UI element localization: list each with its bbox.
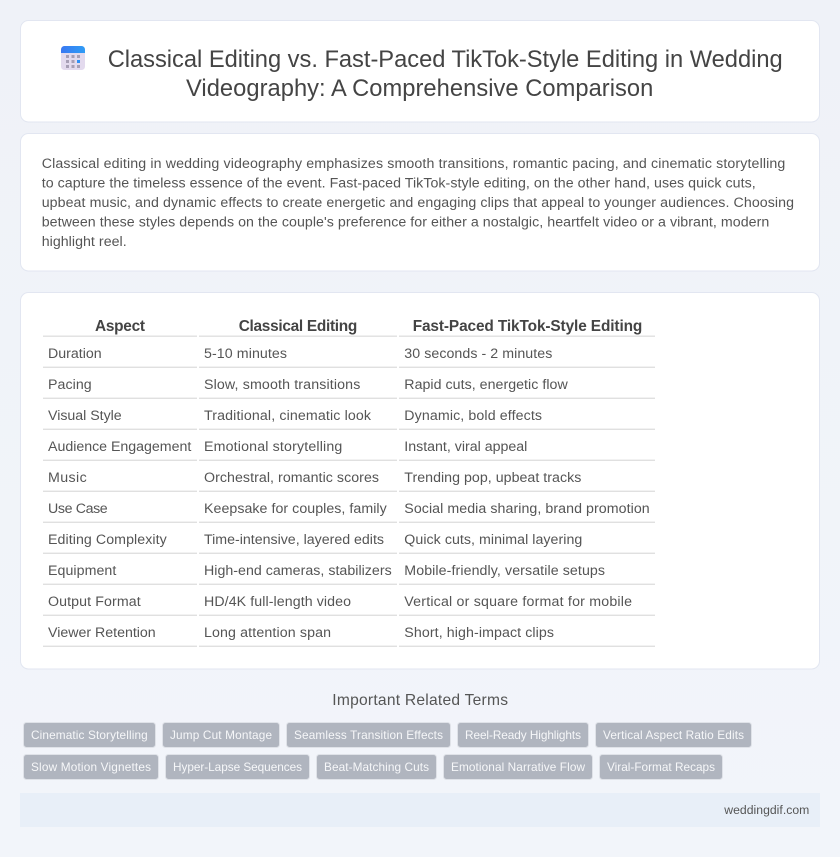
row: output format [43,594,655,616]
row: use case: Social media sharing, brand promotion [404,501,650,517]
row: equipment: Equipment [48,563,116,579]
row: equipment [43,563,655,585]
related term tags [24,722,752,780]
tag: seamless transition effects [286,722,450,748]
row: editing complexity: Time-intensive, layered edits [204,532,384,548]
row: music [43,470,655,492]
row: duration: 5-10 minutes [204,346,287,362]
tag: reel-ready highlights: Reel-Ready Highlights [465,728,581,742]
intro paragraph: highlight reel. [42,234,127,250]
tag: emotional narrative flow [444,754,592,780]
tag: jump cut montage: Jump Cut Montage [170,728,272,742]
row: music: Trending pop, upbeat tracks [404,470,581,486]
tag: jump cut montage [162,722,280,748]
panel: title header [20,20,820,122]
intro paragraph: Classical editing in wedding videography emphasizes smooth transitions, romantic pacing, and cinematic storytelling [42,156,785,172]
row: visual style: Visual Style [48,408,122,424]
tag: reel-ready highlights [458,722,588,748]
row: use case: Use Case [48,501,108,517]
row: audience engagement: Emotional storytelling [204,439,342,455]
row: duration [43,346,655,368]
row: pacing: Pacing [48,377,92,393]
intro paragraph: between these styles depends on the couple's preference for either a nostalgic, heartfelt video or a vibrant, modern [42,214,769,230]
title [108,47,783,102]
row: viewer retention: Short, high-impact clips [404,625,554,641]
footer source text: weddingdif.com [723,803,809,817]
row: visual style: Traditional, cinematic look [204,408,372,424]
tag: cinematic storytelling: Cinematic Storytelling [31,728,148,742]
panel: comparison table [20,292,820,669]
row: viewer retention: Viewer Retention [48,625,156,641]
tag: slow motion vignettes [24,754,158,780]
panel: introduction [20,134,820,271]
heading: important related terms: Important Related Terms [332,692,508,709]
intro paragraph: to capture the timeless essence of the event. Fast-paced TikTok-style editing, on the other hand, uses quick cuts, [42,176,756,192]
tag: hyper-lapse sequences: Hyper-Lapse Sequences [173,760,302,774]
row: pacing [43,377,655,399]
tag: beat-matching cuts: Beat-Matching Cuts [324,760,429,774]
tag: hyper-lapse sequences [166,754,310,780]
row: music: Orchestral, romantic scores [204,470,379,486]
tag: cinematic storytelling [24,722,156,748]
intro paragraph [42,156,794,250]
icon: calendar [61,46,85,70]
row: audience engagement: Audience Engagement [48,439,191,455]
tag: vertical aspect ratio edits [596,722,752,748]
tag: viral-format recaps [600,754,722,780]
row: duration: 30 seconds - 2 minutes [404,346,552,362]
title: Videography: A Comprehensive Comparison [186,76,653,102]
intro paragraph: upbeat music, and dynamic effects to create energetic and engaging clips that appeal to younger audiences. Choosing [42,195,794,211]
table header row: Fast-Paced TikTok-Style Editing [413,318,642,335]
row: viewer retention: Long attention span [204,625,331,641]
row: pacing: Rapid cuts, energetic flow [404,377,568,393]
row: music: Music [48,470,87,486]
row: visual style: Dynamic, bold effects [404,408,542,424]
row: editing complexity: Quick cuts, minimal layering [404,532,582,548]
tag: viral-format recaps: Viral-Format Recaps [607,760,715,774]
row: equipment: Mobile-friendly, versatile setups [404,563,605,579]
title: Classical Editing vs. Fast-Paced TikTok-Style Editing in Wedding [108,47,783,73]
row: visual style [43,408,655,430]
row: audience engagement: Instant, viral appeal [404,439,527,455]
row: output format: Vertical or square format for mobile [404,594,632,610]
table header row: Aspect [95,318,145,335]
tag: vertical aspect ratio edits: Vertical Aspect Ratio Edits [603,728,744,742]
row: duration: Duration [48,346,102,362]
tag: slow motion vignettes: Slow Motion Vignettes [31,760,151,774]
row: viewer retention [43,625,655,647]
table header row: Classical Editing [239,318,357,335]
row: pacing: Slow, smooth transitions [204,377,360,393]
tag: beat-matching cuts [316,754,436,780]
footer [20,793,820,827]
row: editing complexity: Editing Complexity [48,532,168,548]
tag: emotional narrative flow: Emotional Narrative Flow [451,760,585,774]
tag: seamless transition effects: Seamless Transition Effects [294,728,443,742]
row: output format: Output Format [48,594,141,610]
table header row [43,318,655,337]
row: audience engagement [43,439,655,461]
row: output format: HD/4K full-length video [204,594,351,610]
row: use case [43,501,655,523]
row: equipment: High-end cameras, stabilizers [204,563,392,579]
row: editing complexity [43,532,655,554]
row: use case: Keepsake for couples, family [204,501,388,517]
